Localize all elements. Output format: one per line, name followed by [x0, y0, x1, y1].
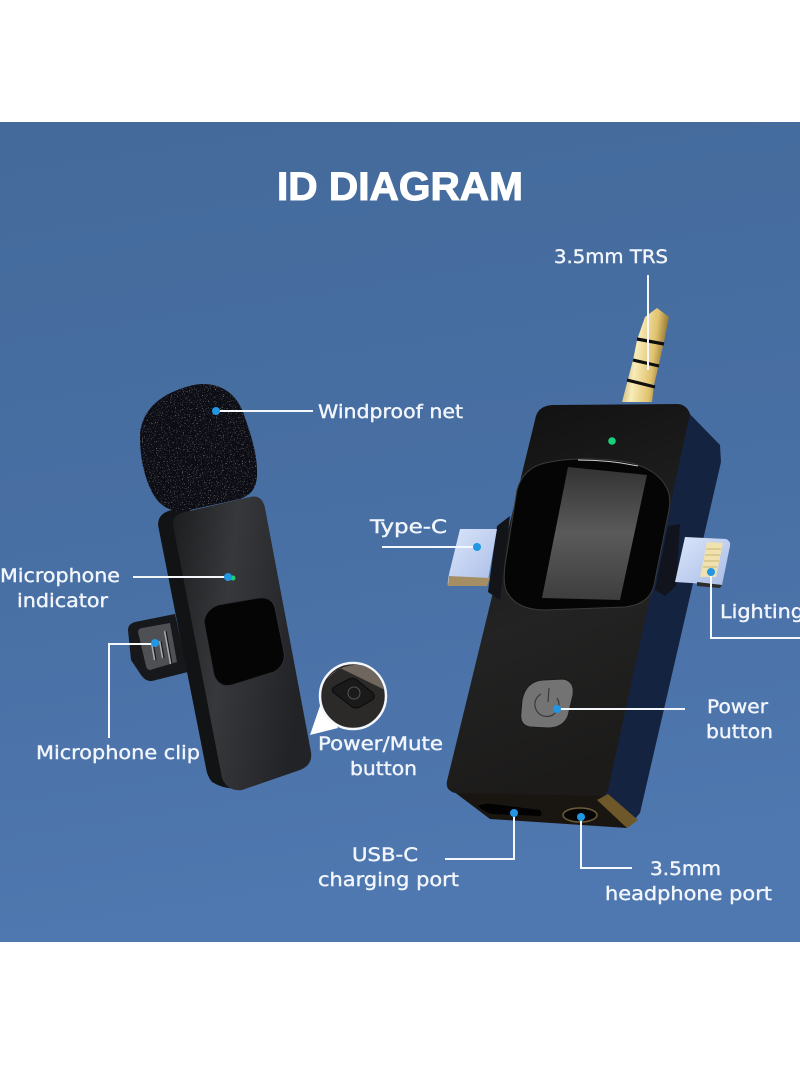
- label: Windproof net: Windproof net: [318, 401, 463, 423]
- LED: [608, 437, 616, 445]
- tab: right: [655, 524, 680, 596]
- label: Power button: [553, 696, 773, 743]
- label: Lighting: Lighting: [720, 601, 800, 623]
- icon: power button: [521, 679, 573, 728]
- title: ID DIAGRAM: [277, 165, 523, 209]
- connector: Lightning: [675, 537, 730, 588]
- label: Microphone indicator: indicator: [17, 590, 108, 612]
- microphone transmitter: [128, 384, 311, 790]
- label: Windproof net: [212, 401, 463, 423]
- label: Microphone indicator: Microphone: [0, 565, 120, 587]
- front face of microphone body: [173, 496, 311, 790]
- adapter front face: [447, 404, 690, 796]
- connector: Type-C: [448, 529, 497, 586]
- label: Microphone clip: [36, 639, 200, 764]
- label: 3.5mm headphone port: 3.5mm: [650, 858, 721, 880]
- panel: blue background: [0, 122, 800, 942]
- icon: windproof foam: [140, 384, 257, 512]
- label: Power/Mute button: Power/Mute: [318, 733, 443, 755]
- icon: gloss window: [204, 598, 284, 686]
- tab: left: [488, 516, 510, 600]
- port: headphone: [563, 808, 597, 822]
- icon: gold TRS jack: [622, 308, 669, 402]
- label: 3.5mm TRS: [554, 246, 668, 370]
- label: Lighting: [707, 568, 800, 638]
- icon: clip: [128, 614, 188, 681]
- label: Type-C: [369, 516, 481, 551]
- label: Microphone clip: Microphone clip: [36, 742, 200, 764]
- label: USB-C charging port: [318, 809, 518, 891]
- indicator LED: [230, 576, 236, 580]
- icon: gloss cradle: [504, 459, 670, 610]
- label: Type-C: Type-C: [369, 516, 447, 538]
- label: Power button: button: [706, 721, 773, 743]
- icon: gold corner: [597, 794, 638, 828]
- label: USB-C charging port: charging port: [318, 869, 459, 891]
- label: Power/Mute button: button: [350, 758, 417, 780]
- label: 3.5mm headphone port: headphone port: [605, 883, 772, 905]
- adapter bottom face: [449, 788, 627, 828]
- label: Power/Mute button: [318, 733, 443, 780]
- label: USB-C charging port: USB-C: [352, 844, 418, 866]
- port: USB-C: [478, 804, 542, 816]
- adapter side face: [600, 404, 721, 828]
- icon: power/mute inset: [310, 663, 386, 735]
- label: Power button: Power: [707, 696, 768, 718]
- back edge of microphone body: [158, 510, 240, 788]
- label: Microphone indicator: [0, 565, 232, 612]
- label: 3.5mm headphone port: [577, 813, 772, 905]
- label: 3.5mm TRS: 3.5mm TRS: [554, 246, 668, 268]
- 3.5mm connector and adapter: [447, 308, 730, 828]
